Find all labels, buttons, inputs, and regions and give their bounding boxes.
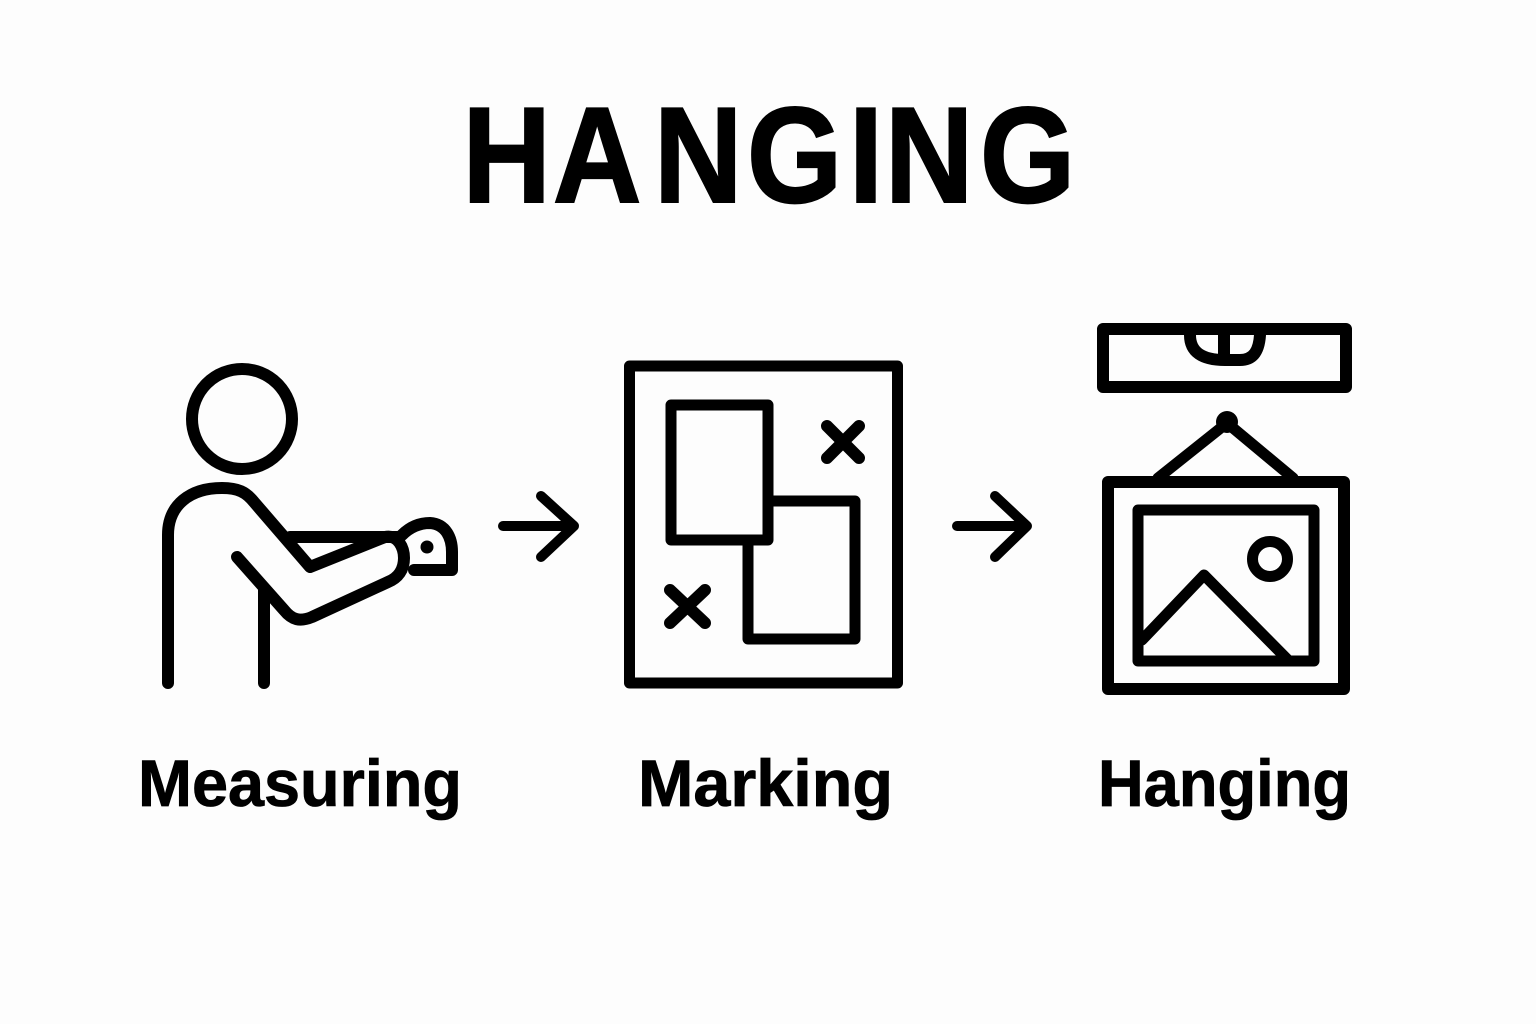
tape measure case: [402, 523, 452, 570]
label: marking: Marking: [638, 746, 893, 820]
level body: [1103, 329, 1346, 387]
picture sun: [1252, 542, 1288, 576]
tape measure hub: [420, 540, 434, 554]
picture frame: [1108, 482, 1344, 689]
hanging nail: [1216, 411, 1238, 433]
first paper template: [671, 405, 768, 540]
hanging wire: [1158, 423, 1293, 478]
second paper template: [748, 501, 855, 639]
arrow: measuring to marking: [503, 496, 574, 557]
person body and arm: [168, 488, 404, 683]
icon: spirit level: [1103, 329, 1346, 387]
label: hanging: Hanging: [1098, 746, 1351, 820]
person leg: [258, 590, 270, 683]
title: HANGING: [463, 80, 1075, 231]
label: measuring: Measuring: [138, 746, 462, 820]
picture inner border: [1138, 510, 1314, 661]
wall outline: [630, 366, 898, 683]
icon: hanging picture: [1108, 411, 1344, 689]
picture mountain: [1142, 575, 1288, 660]
mark: lower cross: [670, 590, 705, 623]
level vial: [1190, 335, 1260, 360]
icon: person measuring: [168, 369, 452, 683]
mark: upper cross: [827, 426, 859, 458]
tape measure strip: [290, 531, 400, 543]
arrow: marking to hanging: [957, 496, 1027, 557]
person head: [192, 369, 292, 469]
icon: wall with marks: [630, 366, 898, 683]
